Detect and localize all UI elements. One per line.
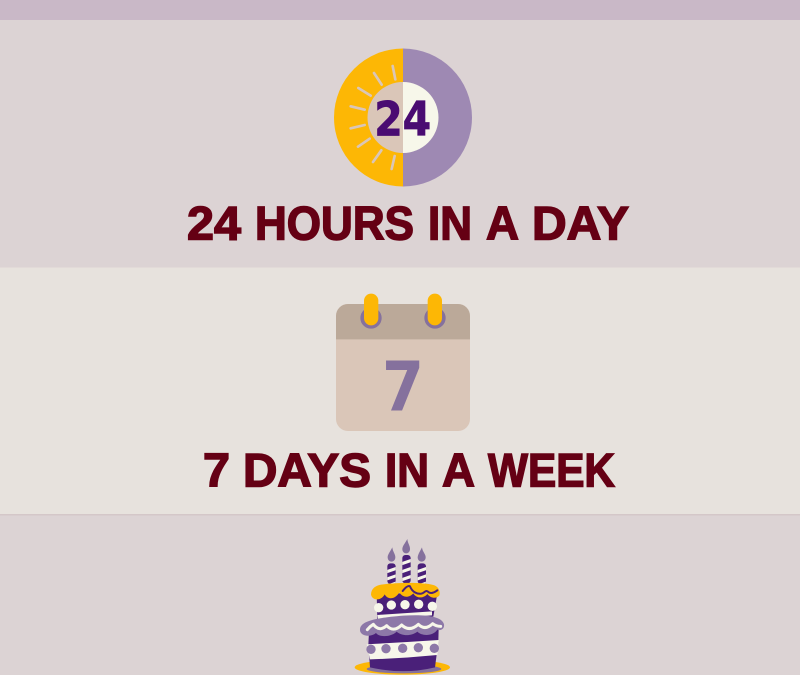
heading: 24 hours in a day xyxy=(187,198,629,250)
panel: 24 hours xyxy=(0,20,800,268)
heading: 7 days in a week: WEEK xyxy=(488,444,615,498)
heading: 24 hours in a day: DAY xyxy=(532,198,629,250)
heading: 24 hours in a day: IN xyxy=(428,198,472,250)
middle frosting xyxy=(360,615,444,636)
heading: 7 days in a week: 7 xyxy=(203,444,230,498)
upper tier xyxy=(377,593,437,620)
candles xyxy=(387,539,426,584)
panel: 7 days xyxy=(0,268,800,515)
top icing xyxy=(371,583,440,599)
heading: 24 hours in a day: A xyxy=(486,198,519,250)
panel: birthday section xyxy=(0,514,800,675)
calendar number: 7 xyxy=(382,348,424,427)
icon: day and night clock xyxy=(334,48,472,186)
icon: birthday cake xyxy=(355,539,450,675)
top band xyxy=(0,0,800,20)
icon: calendar xyxy=(336,294,470,431)
lower tier xyxy=(368,628,439,671)
sun rays xyxy=(351,66,395,169)
plate xyxy=(355,660,450,675)
heading: 7 days in a week: A xyxy=(442,444,475,498)
heading: 24 hours in a day: HOURS xyxy=(255,198,414,250)
heading: 7 days in a week: DAYS xyxy=(243,444,371,498)
heading: 7 days in a week: IN xyxy=(385,444,429,498)
clock number: 24 xyxy=(374,92,431,148)
heading: 7 days in a week xyxy=(203,444,615,498)
heading: 24 hours in a day: 24 xyxy=(187,198,242,250)
